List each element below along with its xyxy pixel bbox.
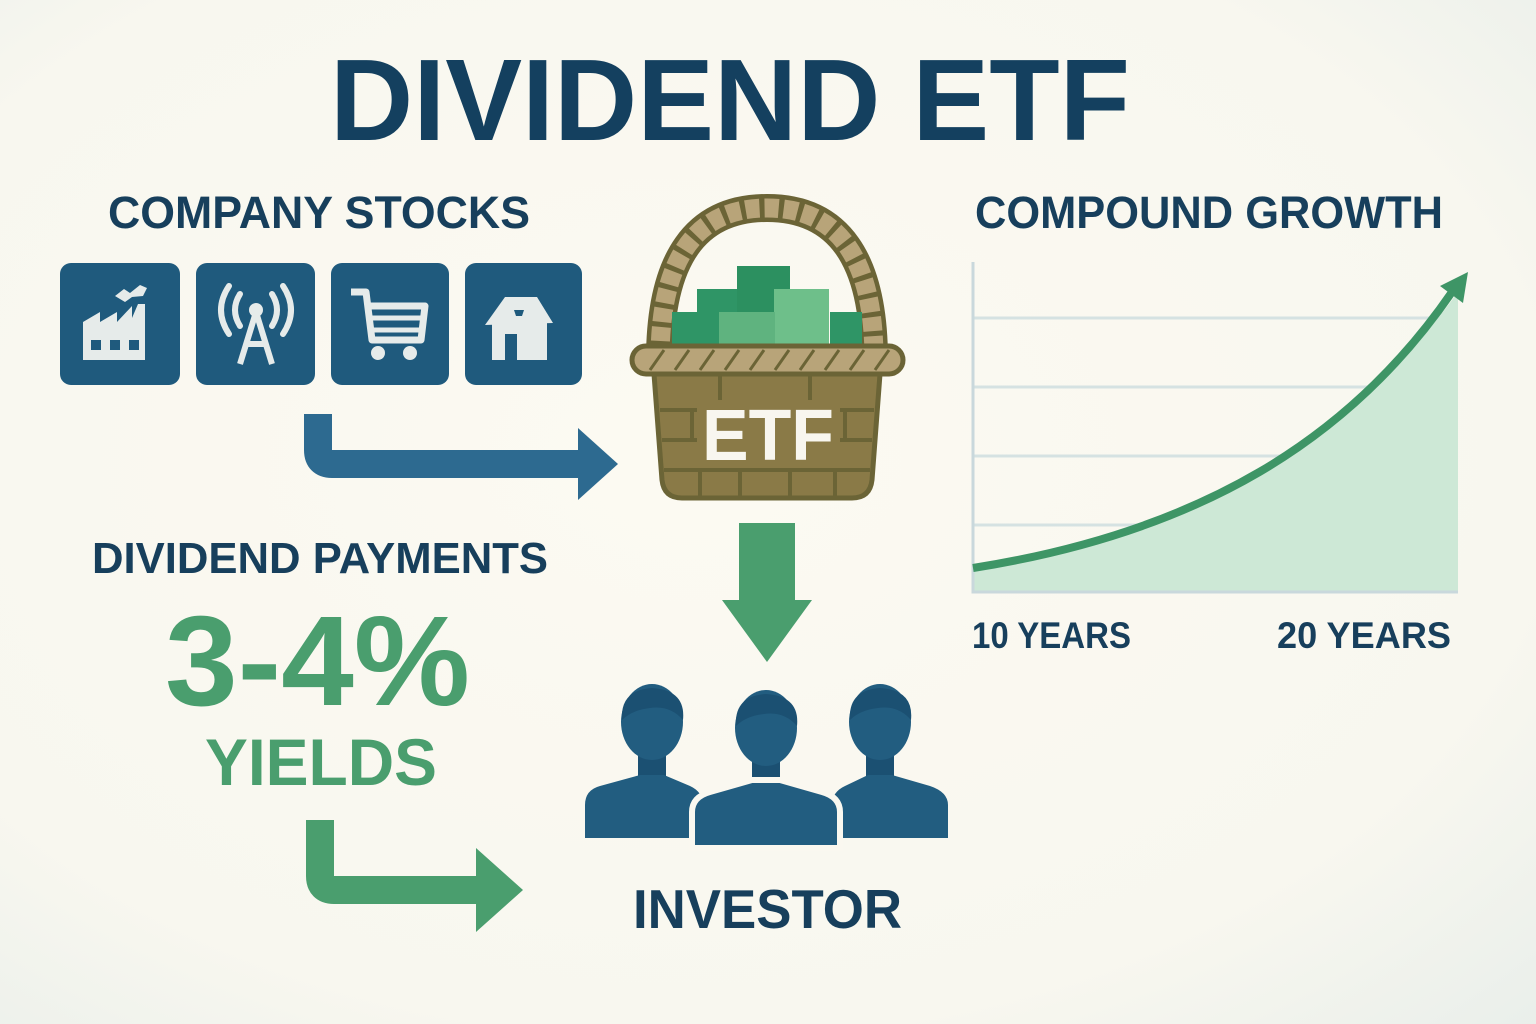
heading: compound growth: COMPOUND GROWTH (975, 187, 1443, 238)
axis label: 20 years: 20 YEARS (1277, 615, 1451, 656)
icon: factory (60, 263, 180, 385)
arrow: stocks to ETF (318, 414, 618, 500)
arrow: dividends to investor (320, 820, 523, 932)
chart: compound growth curve (973, 262, 1468, 592)
icon: cart (331, 263, 449, 385)
arrow: ETF to investor (722, 523, 812, 662)
heading: dividend payments: DIVIDEND PAYMENTS (92, 534, 548, 583)
label: yields: YIELDS (205, 725, 437, 799)
panel: company stock icons (60, 263, 582, 385)
icon: ETF basket (632, 208, 903, 498)
stat: 3-4%: 3-4% (165, 590, 470, 733)
label: investor: INVESTOR (633, 878, 902, 940)
heading: company stocks: COMPANY STOCKS (108, 187, 530, 238)
basket label: ETF (702, 396, 834, 476)
icon: antenna (196, 263, 315, 385)
title: DIVIDEND ETF (330, 35, 1130, 165)
icon: investors (585, 684, 948, 848)
icon: house (465, 263, 582, 385)
axis label: 10 years: 10 YEARS (972, 615, 1131, 656)
